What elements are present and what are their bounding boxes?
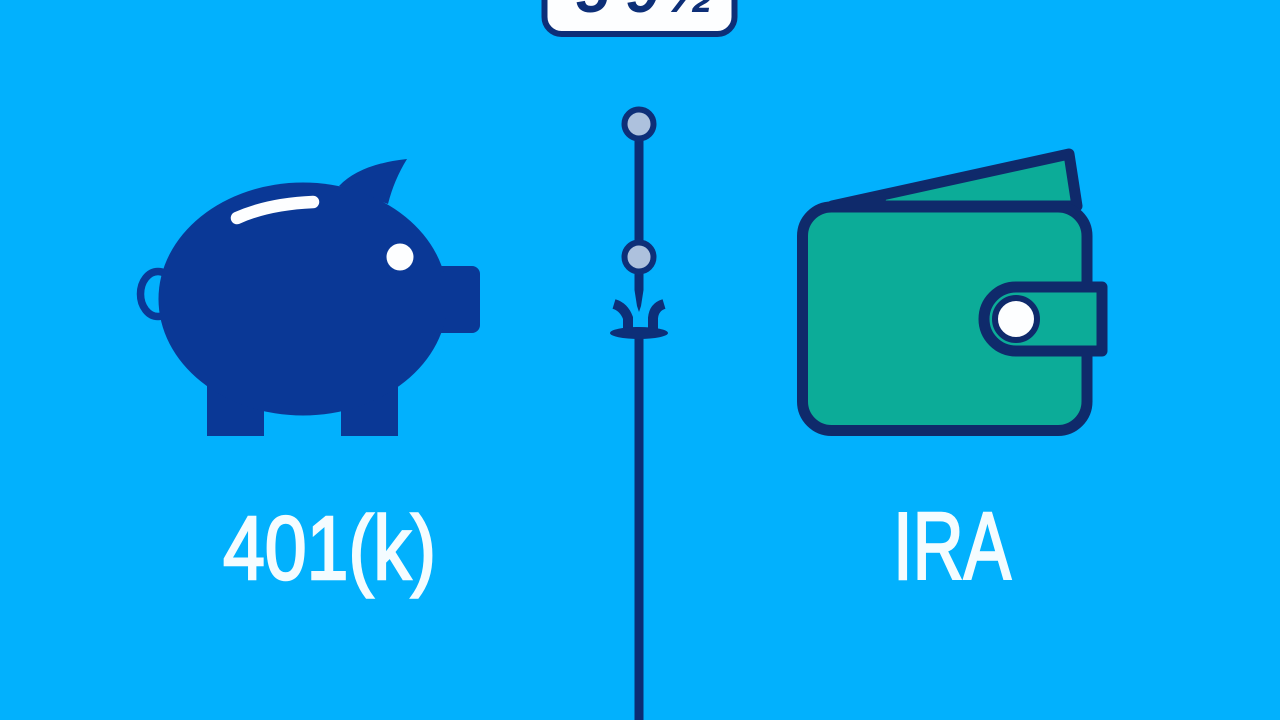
icon: wallet: [802, 154, 1102, 430]
timeline break symbol: [610, 304, 668, 339]
divider timeline: [610, 110, 668, 720]
pig legs: [207, 375, 398, 436]
timeline node: lower: [624, 242, 654, 272]
pig ear: [339, 159, 407, 204]
pig snout: [430, 266, 480, 333]
timeline node: upper: [624, 110, 654, 138]
wallet button: [995, 298, 1037, 340]
pig tail: [140, 272, 176, 316]
wallet flap: [832, 154, 1077, 206]
age badge: [544, 0, 734, 34]
label: 401(k): 401(k): [223, 499, 436, 599]
pig eye: [386, 244, 414, 270]
wallet clasp: [984, 287, 1102, 351]
label: IRA: IRA: [893, 493, 1011, 600]
pig body: [158, 182, 448, 416]
pig highlight: [237, 202, 313, 218]
wallet body: [802, 207, 1087, 430]
icon: piggy bank: [140, 159, 480, 436]
